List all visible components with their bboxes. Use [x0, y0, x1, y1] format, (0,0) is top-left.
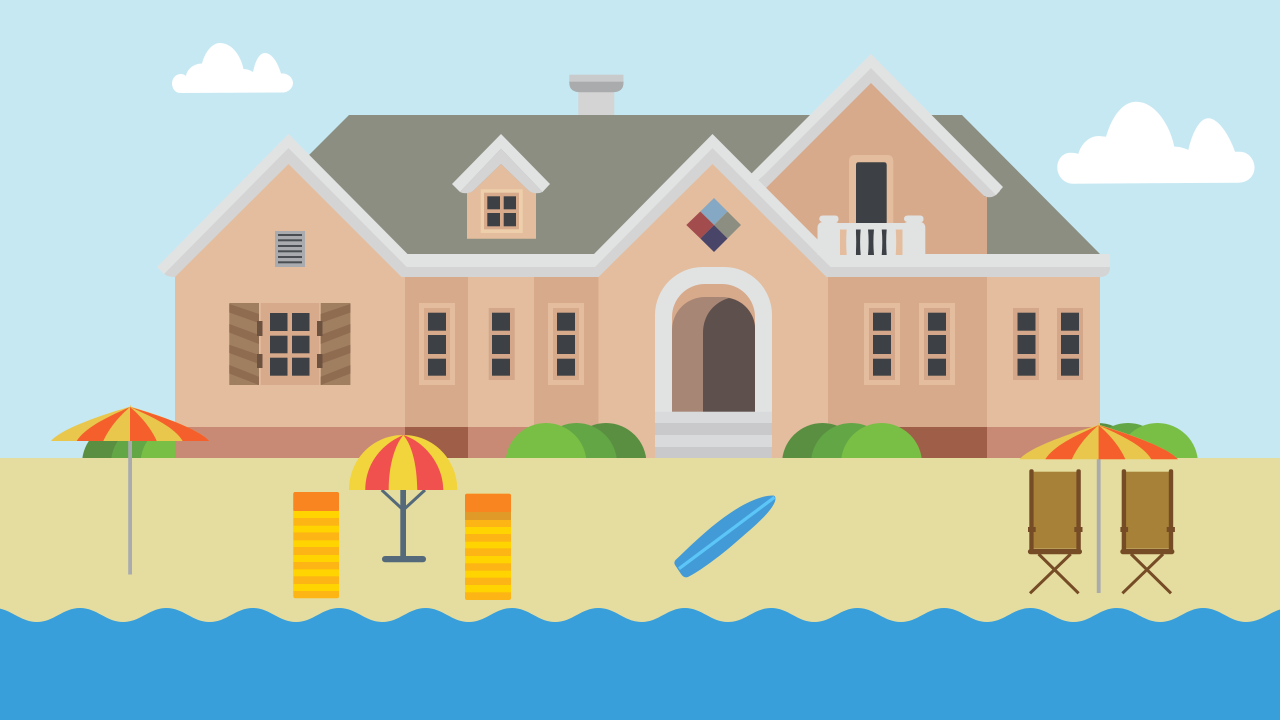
balcony door: [849, 155, 893, 255]
right shutter: [321, 303, 350, 385]
arched entrance: [655, 267, 772, 412]
shrubs left of entrance: [506, 423, 646, 504]
window: [1013, 308, 1039, 380]
window: [489, 308, 515, 380]
bushes behind house, right: [1058, 423, 1198, 504]
dormer: [452, 134, 550, 239]
chimney: [569, 75, 624, 116]
front door: [703, 298, 755, 412]
deck chair left: [1028, 469, 1082, 593]
bushes behind house, left: [82, 423, 222, 504]
eave band, light top: [157, 134, 1110, 274]
parasol right: [1020, 423, 1178, 593]
upper right gable: [740, 54, 1003, 277]
entrance steps: [655, 412, 772, 458]
window: [864, 303, 900, 385]
surfboard: [674, 496, 776, 577]
beach umbrella: [349, 435, 457, 562]
left shutter: [229, 303, 259, 385]
large cloud: [1057, 102, 1254, 184]
eave band, lower shade: [164, 140, 1110, 277]
small cloud: [172, 43, 293, 93]
towel left: [293, 492, 339, 598]
window: [419, 303, 455, 385]
main roof: [290, 115, 1100, 254]
centre gable wall: [598, 164, 826, 277]
parasol left: [51, 404, 209, 574]
shuttered window: [229, 303, 350, 385]
window: [919, 303, 955, 385]
water: [0, 608, 1280, 720]
left gable wall: [175, 164, 402, 277]
shrubs right of entrance: [782, 423, 922, 504]
window: [1057, 308, 1083, 380]
towel right: [465, 494, 511, 600]
house facade: [175, 277, 1100, 458]
attic vent: [275, 231, 305, 267]
decorative diamond window: [686, 198, 741, 252]
sand: [0, 458, 1280, 720]
shutter hinges: [257, 321, 322, 368]
window: [548, 303, 584, 385]
deck chair right: [1120, 469, 1175, 593]
balcony railing: [818, 216, 925, 255]
foundation: [175, 427, 1100, 458]
